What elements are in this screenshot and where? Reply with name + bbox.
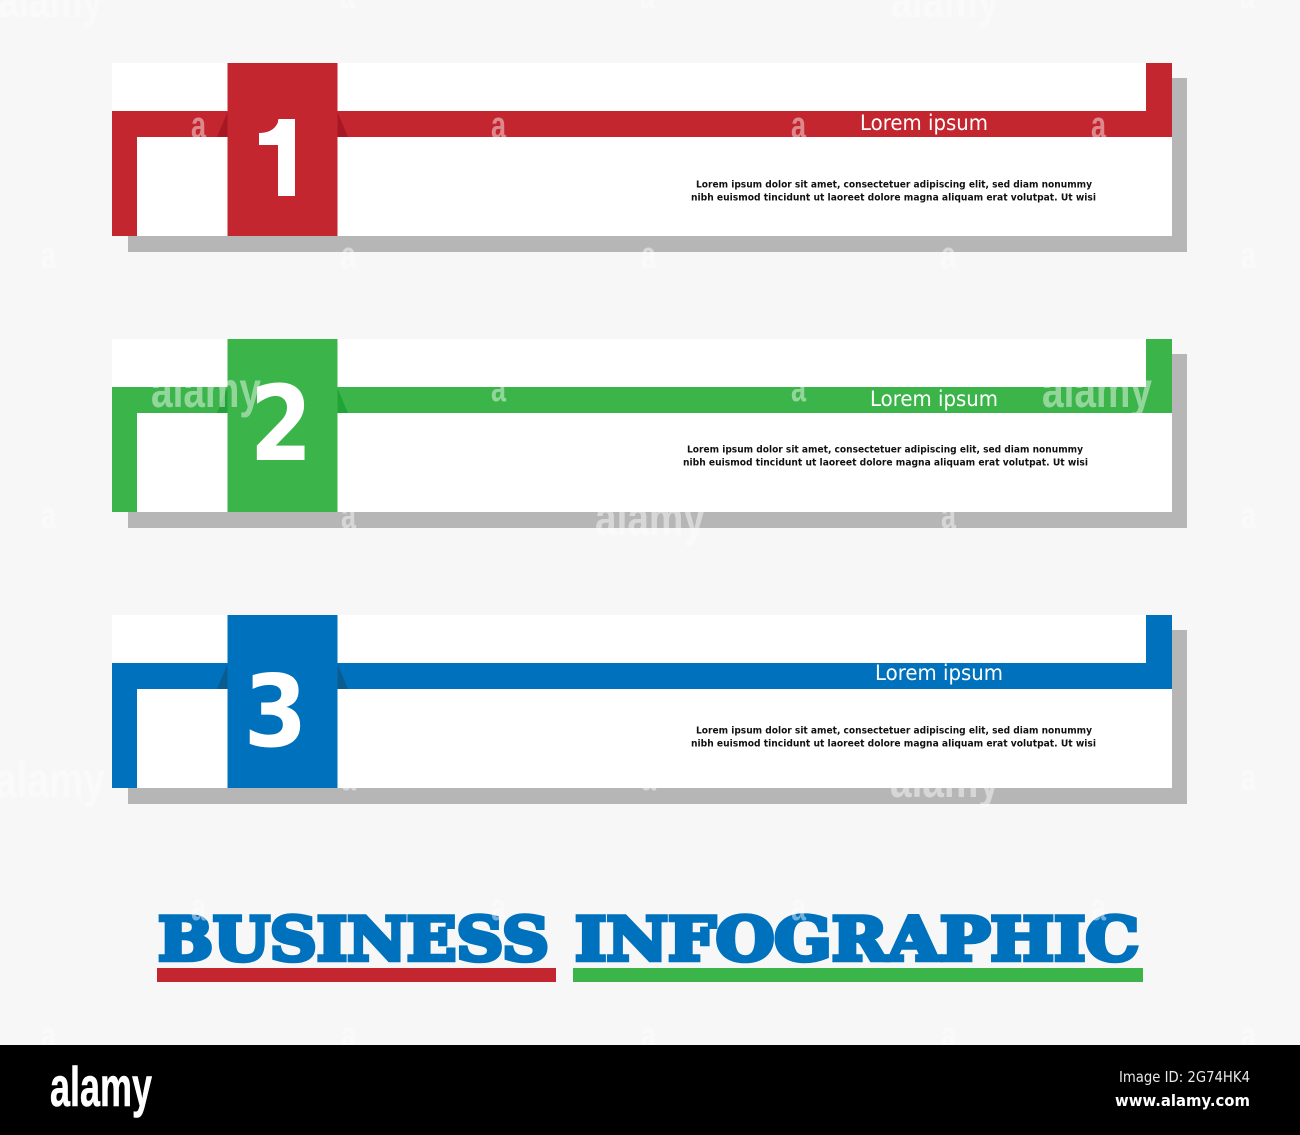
text block: step 2: Lorem ipsum dolor sit amet, consectetuer adipiscing elit, sed diam nonummy [687,444,1083,456]
watermarks: a [491,887,507,929]
title [157,905,1143,982]
shadow: step 2 [128,354,1187,528]
watermarks: alamy [1042,362,1152,418]
watermarks: a [941,235,957,277]
watermarks: a [191,887,207,929]
title word: business: BUSINESS [158,905,549,975]
watermarks: a [1091,887,1107,929]
watermarks: a [941,495,957,537]
watermarks: alamy [595,490,705,546]
watermarks: a [791,368,807,410]
watermarks: a [791,887,807,929]
text block: step 3 [691,726,1096,750]
watermarks: a [491,368,507,410]
heading: step 1: Lorem ipsum [860,111,988,135]
image id: Image ID: 2G74HK4 [1119,1068,1250,1086]
watermarks: a [1241,1015,1257,1057]
text block: step 2 [683,444,1088,468]
underline: red [157,968,556,982]
watermarks: a [341,235,357,277]
website: www.alamy.com [1115,1091,1250,1110]
panel: step 3 [112,615,1187,804]
watermarks: a [641,757,657,799]
fold: step 3 right [337,663,348,689]
shadow: step 1 [128,78,1187,252]
watermarks: a [341,1015,357,1057]
number: 2: 2 [250,363,312,485]
watermarks: a [41,1015,57,1057]
shadow: step 3 [128,630,1187,804]
watermarks: a [941,1015,957,1057]
watermarks: a [341,757,357,799]
number block: step 3 [228,615,338,788]
number block: step 2 [228,339,338,512]
fold: step 2 right [337,387,348,413]
heading: step 2: Lorem ipsum [870,387,998,411]
ribbon: step 2 [112,339,1172,512]
ribbon: step 1 [112,63,1172,236]
fold: step 1 right [337,111,348,137]
number: 3: 3 [244,653,307,770]
text block: step 2: nibh euismod tincidunt ut laoreet dolore magna aliquam erat volutpat. Ut wisi [683,458,1088,468]
watermarks: a [41,495,57,537]
ribbon: step 3 [112,615,1172,788]
watermarks: a [1241,757,1257,799]
text block: step 3: nibh euismod tincidunt ut laoreet dolore magna aliquam erat volutpat. Ut wisi [691,738,1096,750]
card: step 3 [112,615,1172,788]
panel: step 1 [112,63,1187,252]
text block: step 1: Lorem ipsum dolor sit amet, consectetuer adipiscing elit, sed diam nonummy [696,180,1092,190]
fold: step 2 left [217,387,228,413]
watermarks: a [1241,495,1257,537]
text block: step 1 [691,180,1096,204]
fold: step 3 left [217,663,228,689]
number block: step 1 [228,63,338,236]
underline: green [573,968,1143,982]
card: step 2 [112,339,1172,512]
number: 1: 1 [249,99,323,221]
watermarks: alamy [890,752,1000,808]
watermarks: a [191,105,207,147]
watermarks: a [791,105,807,147]
watermarks: a [1241,235,1257,277]
watermarks: a [641,1015,657,1057]
logo: alamy: alamy [50,1055,152,1118]
watermarks: a [341,495,357,537]
fold: step 1 left [217,111,228,137]
watermarks: a [491,105,507,147]
card: step 1 [112,63,1172,236]
title word: infographic: INFOGRAPHIC [575,905,1139,975]
footer bar [0,1045,1300,1135]
number: 1 [259,119,295,196]
watermarks: a [1091,105,1107,147]
watermarks: a [641,235,657,277]
watermarks: a [41,235,57,277]
text block: step 3: Lorem ipsum dolor sit amet, consectetuer adipiscing elit, sed diam nonummy [696,726,1092,736]
heading: step 3: Lorem ipsum [875,661,1003,685]
text block: step 1: nibh euismod tincidunt ut laoreet dolore magna aliquam erat volutpat. Ut wisi [691,192,1096,204]
watermarks: alamy [151,362,261,418]
panel: step 2 [112,339,1187,528]
